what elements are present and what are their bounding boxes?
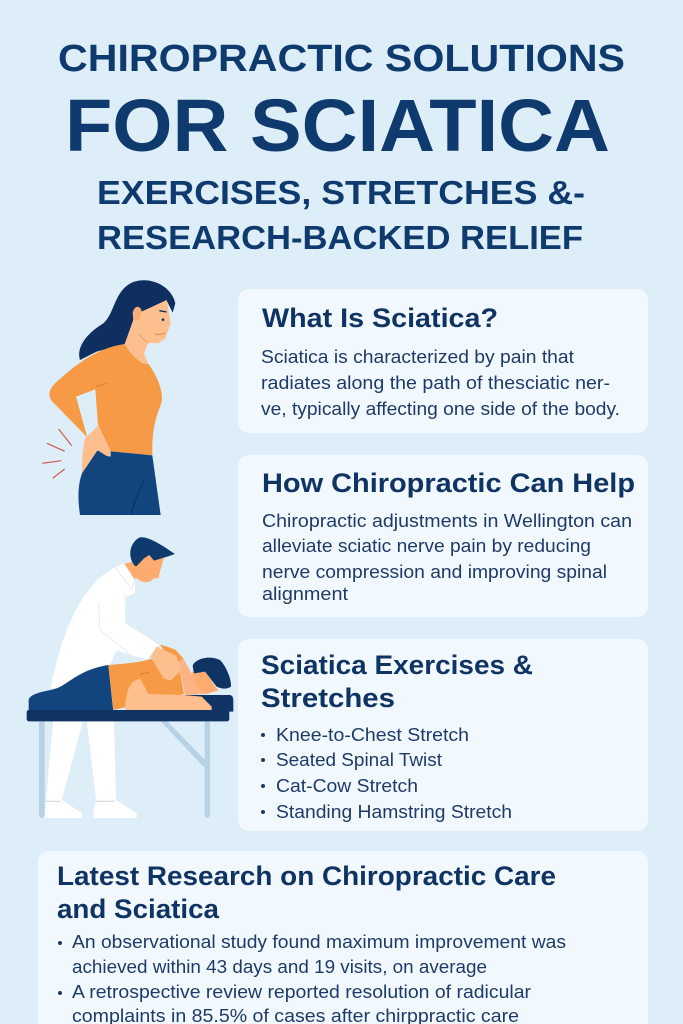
panel: how chiropractic can help: nerve compression and improving spinal [262,562,607,582]
panel: what is sciatica [238,289,648,433]
panel: what is sciatica: radiates along the path of thesciatic ner- [261,373,610,393]
icon: chiropractor treating patient [27,537,233,818]
panel: latest research: A retrospective review reported resolution of radicular [72,982,531,1002]
icon: woman with back pain [42,280,175,515]
title: RESEARCH-BACKED RELIEF [97,219,583,256]
panel: latest research: An observational study found maximum improvement was [72,932,566,952]
panel: exercises and stretches: Standing Hamstring Stretch [276,802,512,822]
panel: latest research: Latest Research on Chiropractic Care [57,861,556,891]
panel: how chiropractic can help: alignment [262,584,348,604]
panel: exercises and stretches: Cat-Cow Stretch [276,776,418,796]
panel: how chiropractic can help [238,455,648,617]
panel: how chiropractic can help: How Chiropractic Can Help [262,468,635,498]
panel: exercises and stretches [238,639,648,831]
title: EXERCISES, STRETCHES &- [97,174,585,211]
title: CHIROPRACTIC SOLUTIONS [58,38,625,80]
panel: how chiropractic can help: alleviate sciatic nerve pain by reducing [262,536,591,556]
panel: exercises and stretches: Seated Spinal Twist [276,750,442,770]
panel: what is sciatica: What Is Sciatica? [262,303,498,333]
panel: latest research: achieved within 43 days and 19 visits, on average [72,957,487,977]
panel: how chiropractic can help: Chiropractic adjustments in Wellington can [262,511,632,531]
panel: exercises and stretches: Sciatica Exercises & [261,650,533,680]
title: FOR SCIATICA [65,84,610,167]
panel: exercises and stretches: Knee-to-Chest Stretch [276,725,469,745]
panel: latest research: and Sciatica [57,894,220,924]
panel: latest research [38,851,648,1024]
panel: what is sciatica: Sciatica is characterized by pain that [261,347,574,367]
panel: what is sciatica: ve, typically affecting one side of the body. [261,399,620,419]
title [58,38,625,256]
panel: exercises and stretches: Stretches [261,683,395,713]
